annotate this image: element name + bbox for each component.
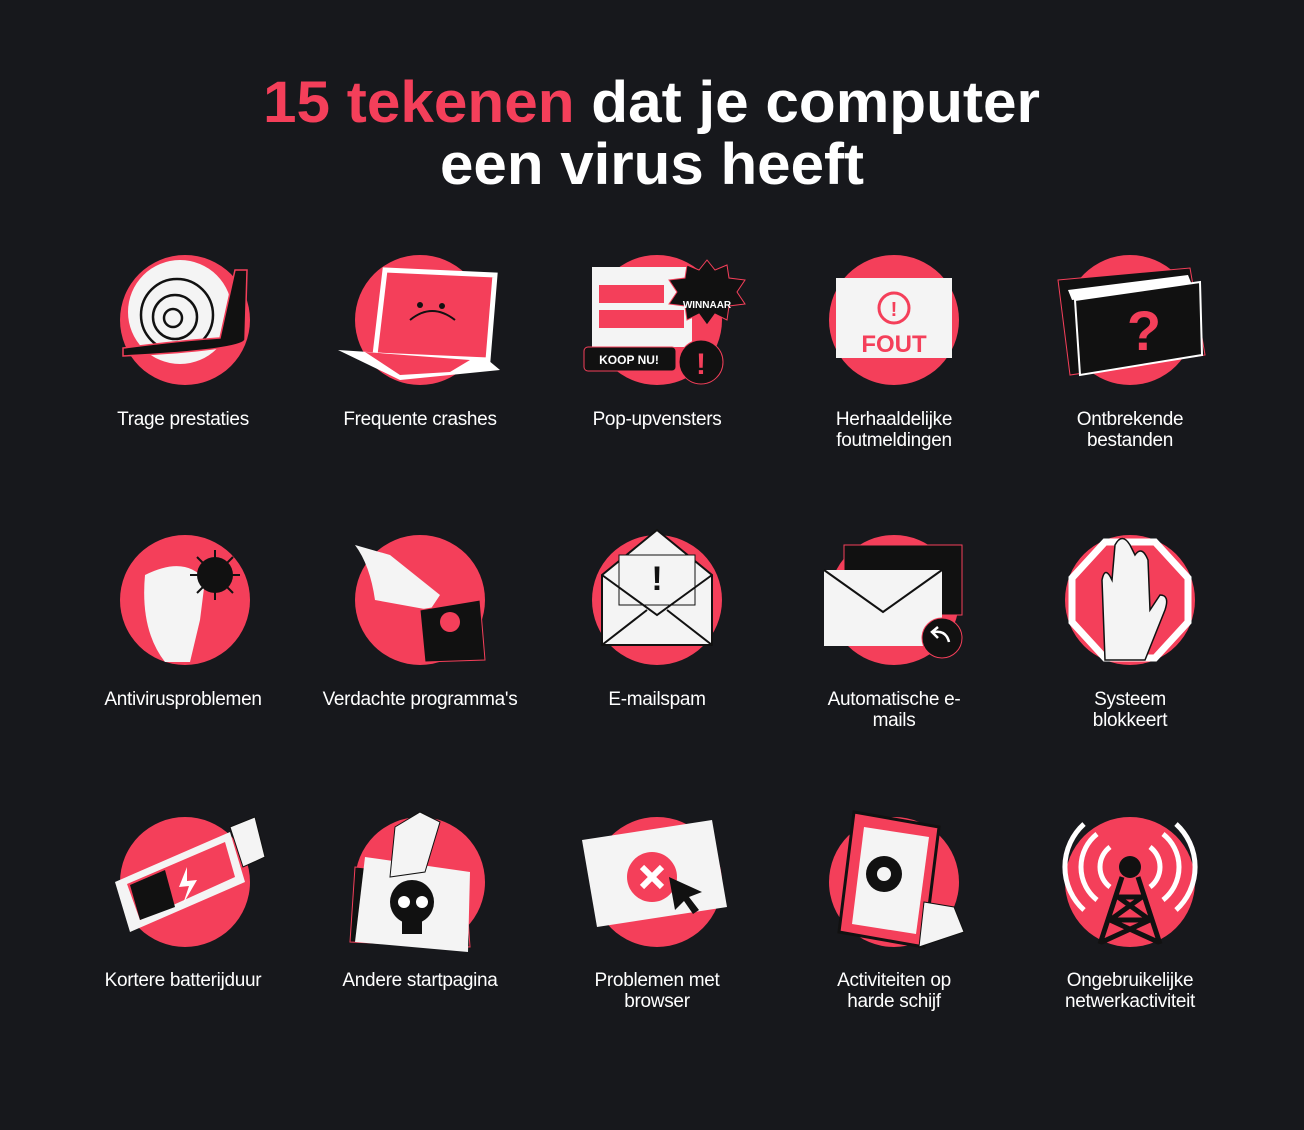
icon: fout: ! bbox=[891, 299, 897, 321]
label: verdachte: Verdachte programma's bbox=[323, 689, 517, 710]
icon: folders bbox=[1058, 255, 1205, 385]
title: een virus heeft bbox=[440, 132, 864, 197]
icon: snail bbox=[120, 255, 250, 385]
text: mails bbox=[873, 710, 915, 731]
label: crashes: Frequente crashes bbox=[343, 409, 497, 430]
icon: suspicious program bbox=[355, 535, 485, 665]
label: spam: E-mailspam bbox=[608, 689, 706, 710]
icon: battery bbox=[115, 817, 265, 947]
label: blokkeert: Systeem bbox=[1094, 689, 1166, 710]
icon: clipboard gear bbox=[829, 812, 964, 947]
icon: fout bbox=[829, 255, 959, 385]
label: netwerk: Ongebruikelijke bbox=[1067, 970, 1193, 991]
text: netwerkactiviteit bbox=[1065, 991, 1196, 1012]
icon: tower bbox=[1065, 817, 1195, 947]
text: blokkeert bbox=[1093, 710, 1168, 731]
label: trage: Trage prestaties bbox=[117, 409, 249, 430]
label: batterij: Kortere batterijduur bbox=[105, 970, 262, 991]
text: bestanden bbox=[1087, 430, 1173, 451]
label: popups: Pop-upvensters bbox=[593, 409, 721, 430]
icon: browser bbox=[582, 817, 727, 947]
icon: popups: ! bbox=[696, 348, 706, 381]
label: harde schijf: Activiteiten op bbox=[837, 970, 951, 991]
icon: email spam bbox=[592, 530, 722, 665]
title: 15 tekenen dat je computer bbox=[263, 70, 1040, 135]
icon: fout: FOUT bbox=[861, 331, 927, 358]
icon: popups: KOOP NU! bbox=[599, 353, 659, 367]
text: harde schijf bbox=[847, 991, 942, 1012]
icon: popups: WINNAAR bbox=[683, 300, 732, 311]
label: auto email: Automatische e- bbox=[828, 689, 960, 710]
icon: stop hand bbox=[1065, 535, 1195, 665]
label: fout: Herhaaldelijke bbox=[836, 409, 952, 430]
label: browser: Problemen met bbox=[595, 970, 720, 991]
text: foutmeldingen bbox=[836, 430, 952, 451]
label: bestanden: Ontbrekende bbox=[1077, 409, 1183, 430]
icon: email spam: ! bbox=[651, 560, 663, 598]
title bbox=[263, 70, 1040, 197]
icon: antivirus bbox=[120, 535, 250, 665]
text: browser bbox=[624, 991, 691, 1012]
icon: popups bbox=[584, 255, 745, 385]
icon: folders: ? bbox=[1127, 299, 1161, 362]
icon: laptop bbox=[338, 255, 500, 385]
label: startpagina: Andere startpagina bbox=[342, 970, 498, 991]
icon: auto email bbox=[824, 535, 962, 665]
label: antivirus: Antivirusproblemen bbox=[104, 689, 262, 710]
icon: start page bbox=[350, 812, 485, 952]
